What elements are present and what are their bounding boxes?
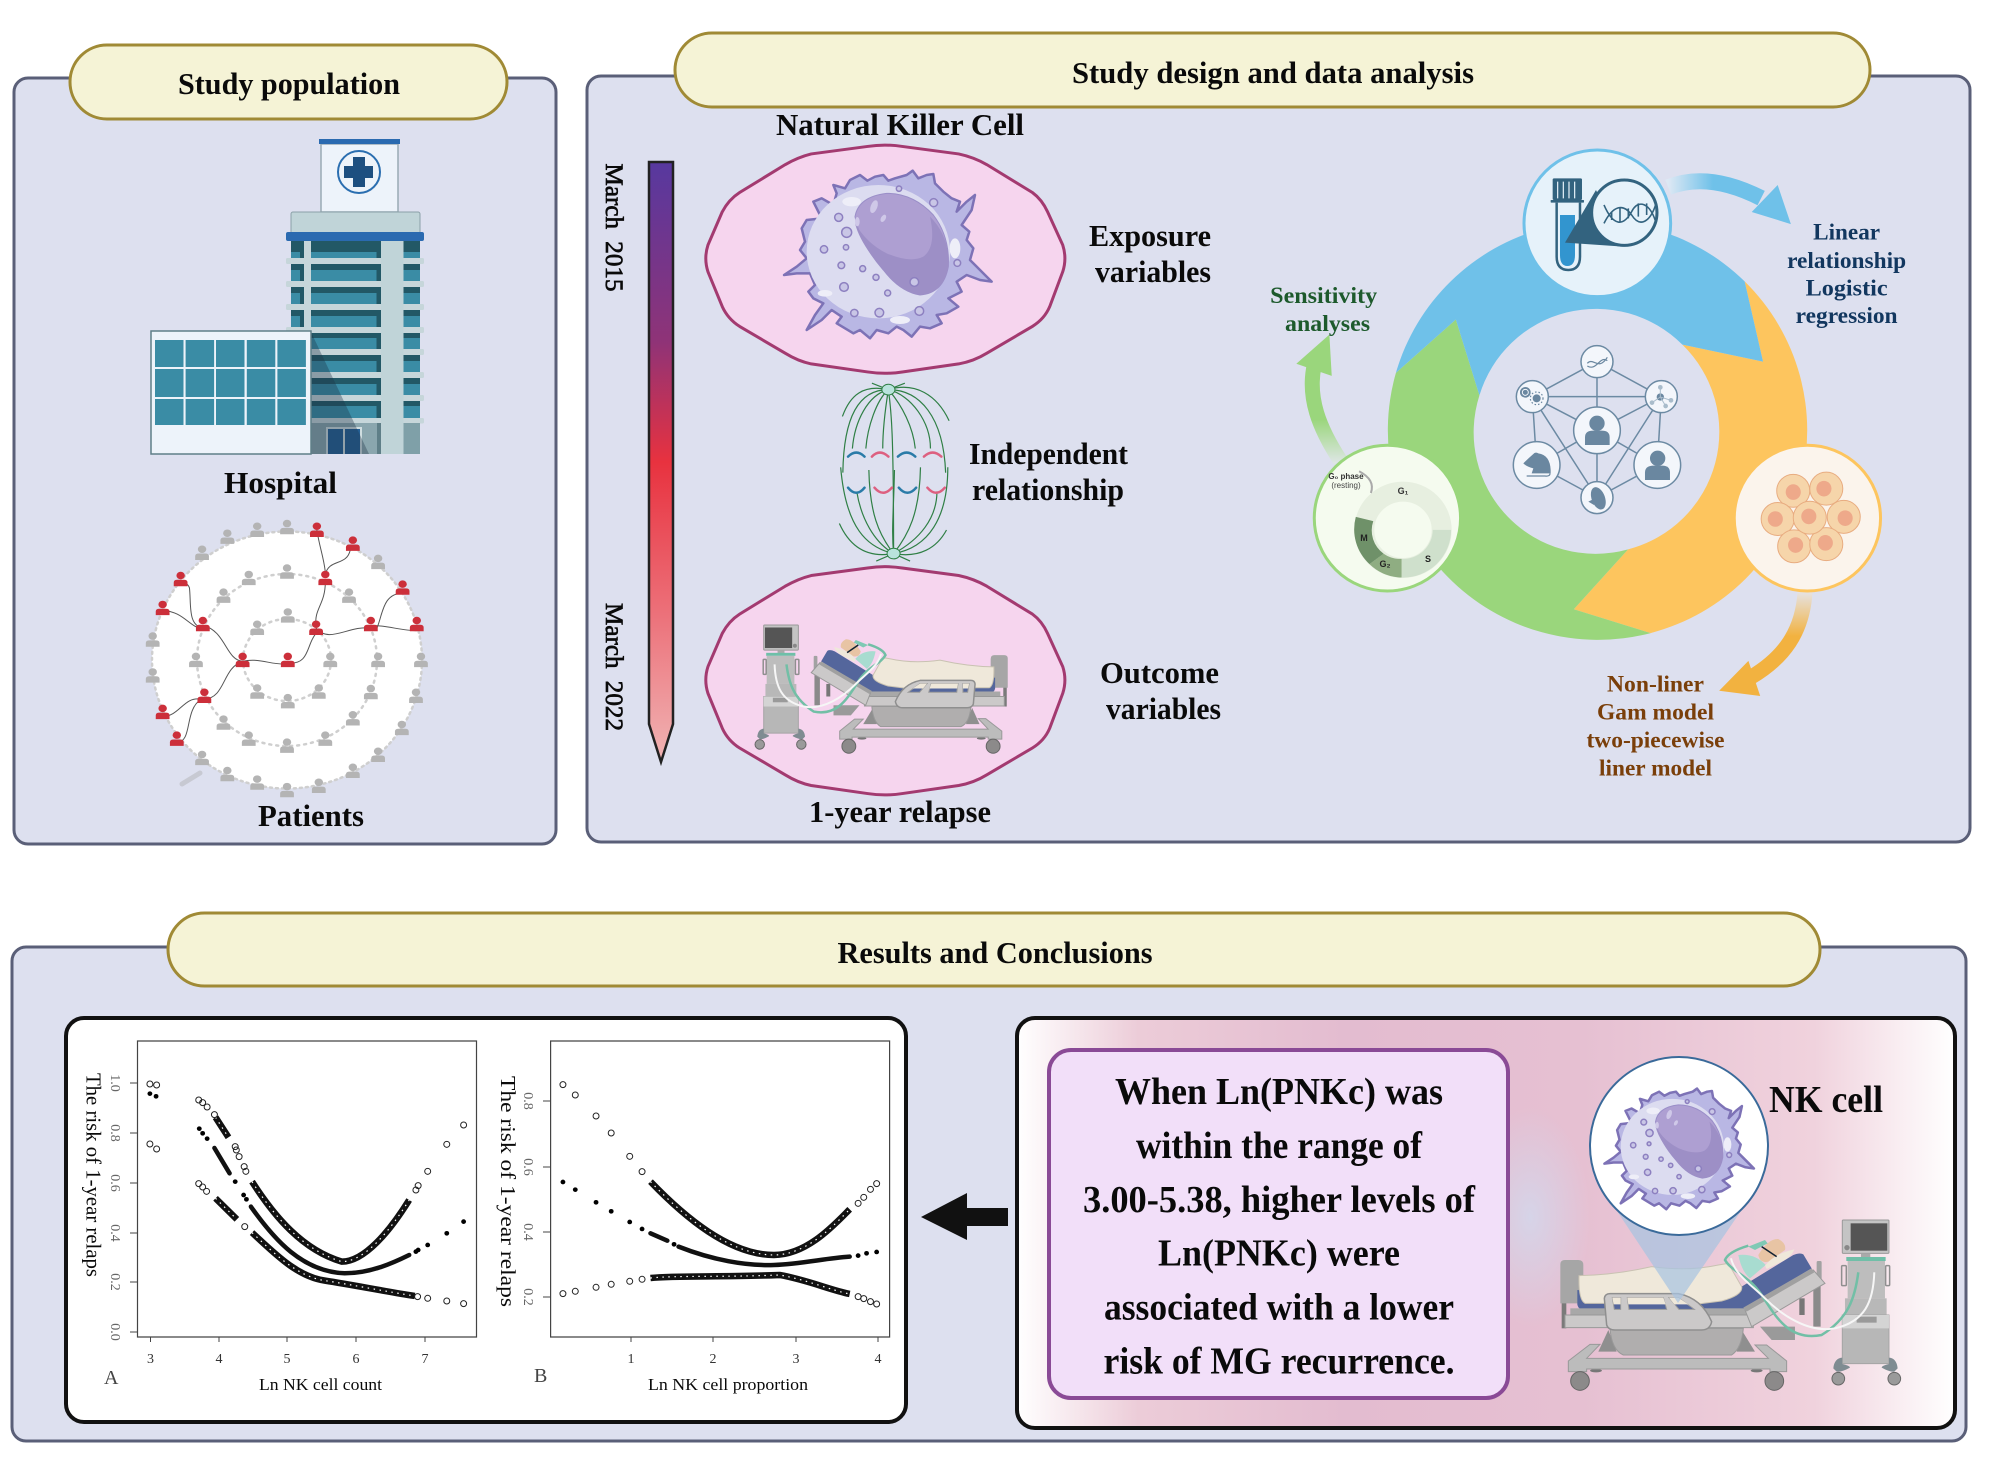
label: sensitivity analyses: analyses xyxy=(1285,311,1370,337)
timeline label: end: March 2022 xyxy=(600,603,627,731)
chart A: risk vs ln NK cell count: 0.0 xyxy=(107,1323,122,1341)
chart A: risk vs ln NK cell count: The risk of 1-year relaps xyxy=(82,1073,106,1277)
chart A: risk vs ln NK cell count: Ln NK cell count xyxy=(259,1375,382,1394)
label: non-linear analysis: Non-liner xyxy=(1607,672,1704,698)
chart A: risk vs ln NK cell count: 7 xyxy=(422,1352,428,1367)
chart A: risk vs ln NK cell count: 0.4 xyxy=(107,1224,122,1242)
conclusion text box: risk of MG recurrence. xyxy=(1104,1340,1454,1382)
label: 1-year relapse: 1-year relapse xyxy=(809,794,991,829)
chart B: risk vs ln NK cell proportion: B xyxy=(534,1365,547,1387)
label: non-linear analysis: Gam model xyxy=(1597,700,1714,726)
label: natural killer cell: Natural Killer Cell xyxy=(776,107,1024,142)
arrow: from conclusion to charts xyxy=(921,1193,1008,1240)
chart A: risk vs ln NK cell count xyxy=(82,1041,476,1394)
chart A: risk vs ln NK cell count: 0.2 xyxy=(107,1273,122,1291)
chart A: risk vs ln NK cell count: 6 xyxy=(352,1352,360,1367)
arrow: to sensitivity analyses xyxy=(1296,335,1340,460)
conclusion text box xyxy=(1049,1050,1508,1398)
arrow: to non-linear analysis xyxy=(1719,592,1805,696)
heading pill: study population: Study population xyxy=(178,66,400,101)
label: outcome variables xyxy=(1100,655,1221,726)
magnified view: NK cell xyxy=(1590,1057,1768,1303)
label: outcome variables: variables xyxy=(1106,691,1221,726)
illustration: ventilated patient in bed xyxy=(1560,1220,1901,1390)
timeline arrow xyxy=(600,162,673,762)
label: non-linear analysis: liner model xyxy=(1599,756,1712,782)
cell-cycle phase labels: S xyxy=(1425,554,1431,564)
chart B: risk vs ln NK cell proportion: 4 xyxy=(874,1352,882,1367)
chart A: risk vs ln NK cell count: 5 xyxy=(284,1352,290,1367)
chart B: risk vs ln NK cell proportion: The risk of 1-year relaps xyxy=(496,1076,520,1307)
cell-cycle phase labels: G₂ xyxy=(1380,559,1391,569)
label: linear analysis: Logistic xyxy=(1806,276,1888,302)
exposure shape with NK cell xyxy=(706,145,1065,373)
label: hospital: Hospital xyxy=(224,465,337,500)
label: linear analysis: regression xyxy=(1796,303,1898,329)
icon: cells xyxy=(1734,445,1881,591)
icon: mitotic spindle xyxy=(839,383,949,561)
label: independent relationship xyxy=(969,436,1129,507)
label: non-linear analysis: two-piecewise xyxy=(1586,728,1724,754)
conclusion text box: Ln(PNKc) were xyxy=(1158,1232,1400,1274)
diagram: patient network xyxy=(146,520,428,797)
chart A: risk vs ln NK cell count: 4 xyxy=(216,1352,222,1367)
timeline label: start: March 2015 xyxy=(600,164,627,292)
icon: hospital building xyxy=(151,139,424,454)
icon: network of study elements xyxy=(1513,346,1681,514)
cell-cycle phase labels: G₀ phase xyxy=(1328,472,1364,481)
label: independent relationship: Independent xyxy=(969,436,1129,471)
label: NK cell: NK cell xyxy=(1769,1079,1883,1121)
label: linear analysis xyxy=(1787,220,1906,329)
heading pill: results xyxy=(168,913,1820,986)
heading pill: results: Results and Conclusions xyxy=(838,935,1152,970)
label: outcome variables: Outcome xyxy=(1100,655,1219,690)
label: exposure variables xyxy=(1089,218,1211,289)
chart A: risk vs ln NK cell count: 0.6 xyxy=(107,1174,122,1192)
chart B: risk vs ln NK cell proportion: 1 xyxy=(628,1352,634,1367)
chart B: risk vs ln NK cell proportion: 0.6 xyxy=(520,1158,535,1176)
outcome shape with ventilated patient xyxy=(706,567,1065,795)
chart B: risk vs ln NK cell proportion: 0.8 xyxy=(520,1092,535,1110)
icon: cell cycle xyxy=(1314,445,1461,591)
conclusion text box: 3.00-5.38, higher levels of xyxy=(1083,1179,1476,1221)
panel: study population xyxy=(14,45,556,844)
label: patients: Patients xyxy=(258,798,364,833)
chart B: risk vs ln NK cell proportion: 2 xyxy=(710,1352,716,1367)
chart B: risk vs ln NK cell proportion: 3 xyxy=(792,1352,800,1367)
cell-cycle phase labels: G₁ xyxy=(1398,486,1409,496)
label: linear analysis: Linear xyxy=(1813,220,1880,246)
cell-cycle phase labels xyxy=(1328,472,1431,569)
conclusion frame xyxy=(1017,1018,1955,1428)
conclusion text box: associated with a lower xyxy=(1104,1286,1454,1328)
label: independent relationship: relationship xyxy=(972,472,1124,507)
label: non-linear analysis xyxy=(1586,672,1724,782)
chart B: risk vs ln NK cell proportion xyxy=(496,1041,890,1394)
conclusion text box: within the range of xyxy=(1136,1125,1423,1167)
chart A: risk vs ln NK cell count: 1.0 xyxy=(107,1074,122,1092)
heading pill: study population xyxy=(70,45,507,119)
diagram: analysis cycle xyxy=(1270,150,1906,781)
chart B: risk vs ln NK cell proportion: 0.4 xyxy=(520,1223,535,1241)
cycle ring xyxy=(1388,221,1807,640)
label: exposure variables: Exposure xyxy=(1089,218,1211,253)
label: sensitivity analyses: Sensitivity xyxy=(1270,283,1377,309)
heading pill: study design xyxy=(675,33,1870,107)
chart B: risk vs ln NK cell proportion: 0.2 xyxy=(520,1288,535,1306)
label: linear analysis: relationship xyxy=(1787,248,1906,274)
chart B: risk vs ln NK cell proportion: Ln NK cell proportion xyxy=(648,1375,809,1394)
panel: results and conclusions xyxy=(12,913,1966,1441)
arrow: to linear analysis xyxy=(1668,181,1791,224)
label: sensitivity analyses xyxy=(1270,283,1377,337)
cell-cycle phase labels: (resting) xyxy=(1331,481,1361,490)
conclusion text box: When Ln(PNKc) was xyxy=(1115,1071,1443,1113)
cell-cycle phase labels: M xyxy=(1360,533,1368,543)
label: exposure variables: variables xyxy=(1095,254,1211,289)
chart A: risk vs ln NK cell count: 0.8 xyxy=(107,1124,122,1142)
icon: test tube and DNA xyxy=(1524,150,1671,297)
heading pill: study design: Study design and data analysis xyxy=(1072,55,1474,90)
chart frame xyxy=(66,1018,906,1422)
chart A: risk vs ln NK cell count: 3 xyxy=(147,1352,154,1367)
chart A: risk vs ln NK cell count: A xyxy=(104,1367,119,1389)
